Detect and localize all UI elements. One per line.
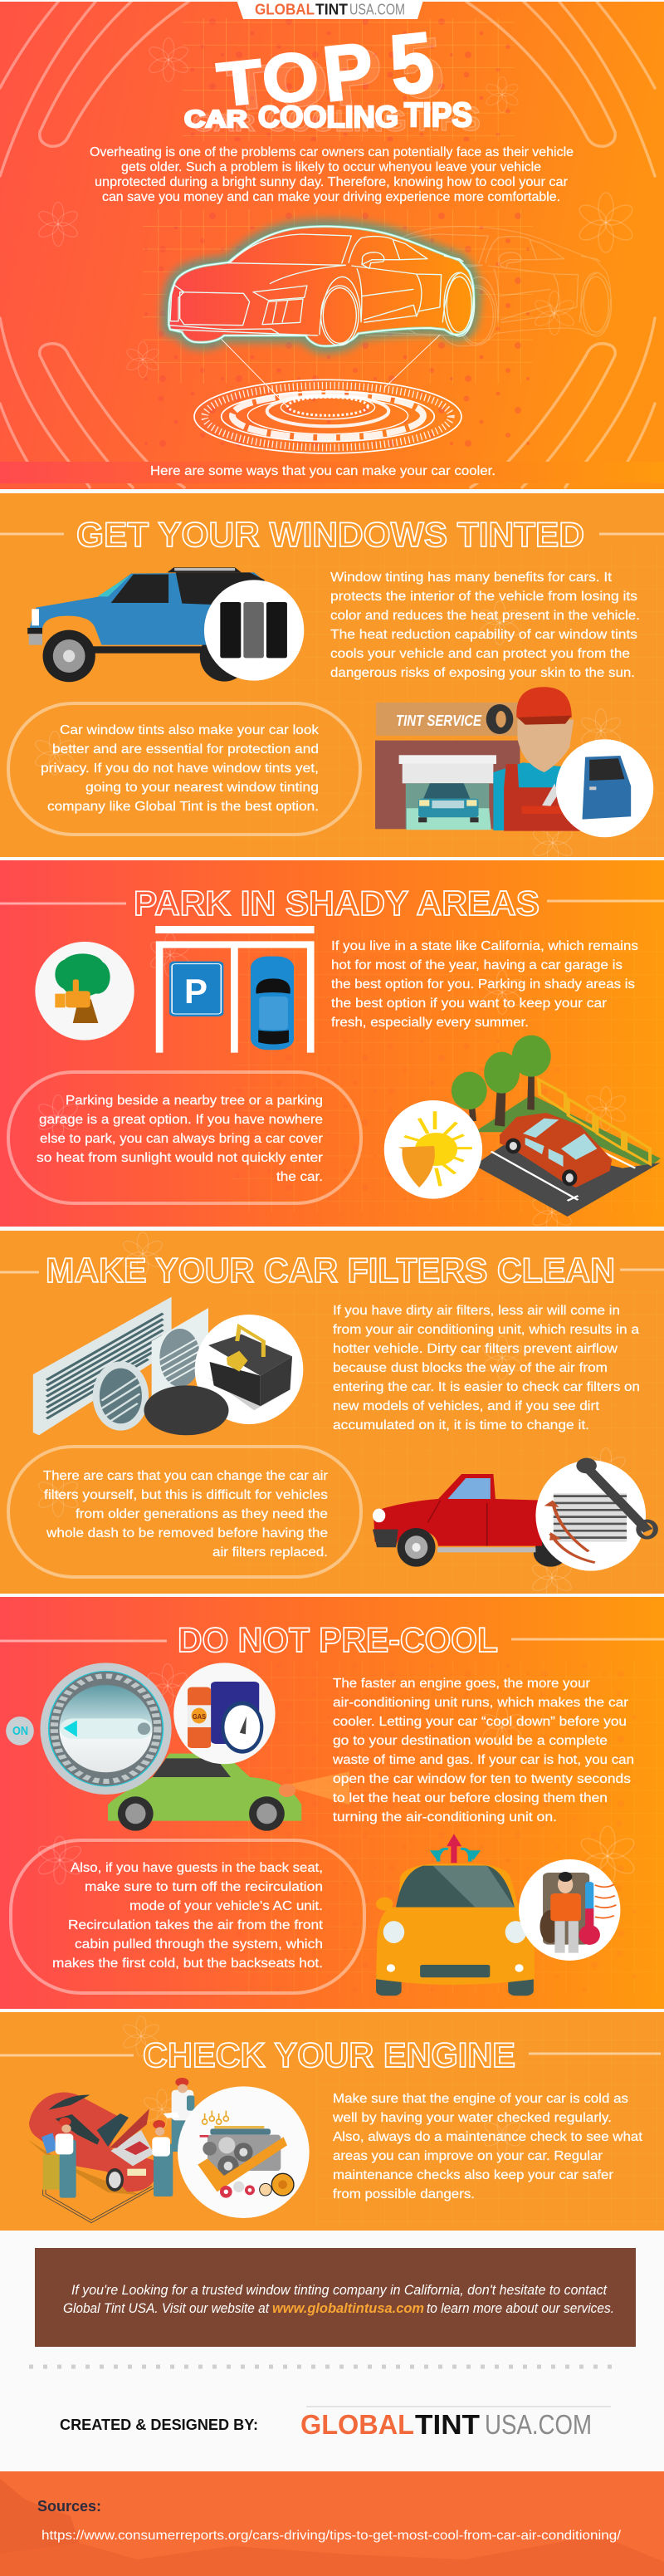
callout capsule: filters yourself, but this is difficult for vehicles: [44, 1488, 328, 1502]
callout capsule: Also, if you have guests in the back seat,: [71, 1861, 323, 1875]
title: T: [214, 47, 266, 120]
body text: hot for most of the year, having a car garage is: [331, 958, 622, 972]
logo tab: TINT: [315, 2, 348, 18]
callout capsule: so heat from sunlight would not quickly enter: [37, 1151, 323, 1165]
illustration: tint service garage and mechanic: [375, 687, 653, 837]
body text: fresh, especially every summer.: [331, 1016, 529, 1030]
intro text: unprotected during a bright sunny day. Therefore, knowing how to cool your car: [95, 175, 568, 189]
body text: If you live in a state like California, which remains: [331, 939, 638, 953]
heading: [0, 884, 664, 923]
body text: maintenance checks also keep your car safer: [333, 2168, 613, 2182]
body text: the best option for you. Parking in shady areas is: [331, 977, 635, 992]
callout capsule: the car.: [276, 1170, 323, 1184]
callout capsule: mode of your vehicle's AC unit.: [129, 1899, 323, 1913]
panel: check your engine: [0, 2012, 664, 2231]
icon: tree with thumbs up: [35, 942, 134, 1041]
callout capsule: [8, 1072, 361, 1203]
body text: new models of vehicles, and if you see dirt: [333, 1399, 600, 1413]
panel: call to action: If you're Looking for a trusted window tinting company in California, don't hesitate to contact: [71, 2282, 608, 2298]
body text: color and reduces the heat present in the vehicle.: [330, 609, 640, 623]
callout capsule: company like Global Tint is the best option.: [47, 800, 319, 814]
body text: go to your destination would be a complete: [333, 1734, 608, 1748]
title: COOLING: [266, 104, 407, 138]
callout capsule: from older generations as they need the: [76, 1507, 328, 1521]
callout capsule: [8, 1447, 361, 1577]
heading: MAKE YOUR CAR FILTERS CLEAN: [46, 1251, 615, 1290]
title: CAR: [184, 106, 247, 133]
title: COOLING: [258, 100, 398, 134]
panel: hero: [0, 0, 664, 489]
panel: park in shady areas: [0, 860, 664, 1234]
callout capsule: else to park, you can always bring a car cover: [40, 1132, 323, 1146]
callout capsule: garage is a great option. If you have nowhere: [39, 1113, 323, 1127]
credit: GLOBAL: [300, 2409, 414, 2440]
title: P: [319, 26, 378, 118]
divider dots: [29, 2365, 612, 2368]
heading: GET YOUR WINDOWS TINTED: [76, 515, 584, 554]
callout capsule: better and are essential for protection and: [52, 742, 319, 757]
body text: areas you can improve on your car. Regular: [333, 2149, 603, 2163]
title: 5: [395, 19, 448, 118]
callout capsule: [8, 703, 360, 835]
illustration: green car, AC knob, gas: [6, 1663, 349, 1831]
sign label: TINT SERVICE: [396, 713, 482, 729]
callout capsule: Parking beside a nearby tree or a parking: [66, 1094, 323, 1108]
credit: CREATED & DESIGNED BY:: [60, 2417, 258, 2433]
illustration: yellow car and hot passenger: [376, 1834, 620, 1996]
panel: call to action: Global Tint USA. Visit our website at: [63, 2300, 270, 2316]
illustration: hologram platform: [194, 335, 461, 453]
illustration: blue truck and tint rolls: [27, 567, 304, 682]
panel: do not pre-cool: [0, 1597, 664, 2009]
body text: If you have dirty air filters, less air will come in: [333, 1304, 620, 1318]
body text: accumulated on it, it is time to change it.: [333, 1418, 589, 1432]
title: TIPS: [404, 95, 472, 134]
title: 5: [385, 14, 438, 113]
illustration: isometric parking with trees: [384, 1036, 661, 1217]
heading: CHECK YOUR ENGINE: [143, 2035, 515, 2074]
panel: call to action: [35, 2248, 636, 2347]
illustration: parking bay: [155, 926, 315, 1053]
body text: Window tinting has many benefits for cars. It: [330, 571, 613, 585]
body text: The faster an engine goes, the more your: [333, 1677, 590, 1691]
callout capsule: going to your nearest window tinting: [85, 781, 319, 795]
body text: well by having your water checked regularly.: [332, 2111, 612, 2125]
body text: waste of time and gas. If your car is hot, you can: [332, 1753, 634, 1767]
heading: PARK IN SHADY AREAS: [134, 884, 540, 923]
credit: TINT: [415, 2409, 480, 2440]
callout capsule: cabin pulled through the system, which: [75, 1937, 323, 1952]
body text: from your air conditioning unit, which results in a: [333, 1323, 639, 1337]
body text: [330, 571, 640, 680]
credit: USA.COM: [485, 2409, 592, 2440]
heading: DO NOT PRE-COOL: [178, 1620, 498, 1659]
parking sign letter: P: [184, 972, 208, 1011]
panel: call to action: to learn more about our services.: [427, 2300, 614, 2316]
title: T: [224, 51, 276, 125]
title: P: [329, 31, 388, 123]
callout capsule: make sure to turn off the recirculation: [85, 1880, 323, 1894]
body text: the best option if you want to keep your car: [331, 997, 607, 1011]
body text: dangerous risks of exposing your skin to the sun.: [330, 666, 635, 680]
panel: sources: [0, 2471, 664, 2576]
illustration: mechanics repairing red car: [27, 2078, 194, 2223]
panel: call to action: www.globaltintusa.com: [272, 2300, 424, 2316]
illustration: vents, filter box: [33, 1297, 303, 1435]
body text: [331, 939, 638, 1030]
callout capsule: whole dash to be removed before having the: [46, 1526, 328, 1540]
illustration: glowing car: [168, 227, 612, 346]
GAS label: GAS: [193, 1713, 207, 1721]
source link: https://www.consumerreports.org/cars-driving/tips-to-get-most-cool-from-car-air-conditioning/: [42, 2529, 622, 2543]
icon: engine with check mark: [178, 2086, 310, 2218]
intro text: [90, 145, 574, 204]
body text: air-conditioning unit runs, which makes the car: [333, 1696, 628, 1710]
sources heading: Sources:: [37, 2498, 101, 2515]
title: [184, 14, 481, 138]
body text: to let the heat our before closing them then: [333, 1791, 608, 1805]
body text: entering the car. It is easier to check car filters on: [333, 1380, 640, 1394]
callout capsule: Car window tints also make your car look: [60, 723, 319, 737]
callout capsule: privacy. If you do not have window tints yet,: [41, 762, 319, 776]
body text: Make sure that the engine of your car is cold as: [333, 2092, 628, 2106]
callout capsule: Recirculation takes the air from the front: [68, 1918, 324, 1932]
body text: cools your vehicle and can protect you from the: [330, 647, 630, 661]
callout capsule: makes the first cold, but the backseats hot.: [52, 1956, 323, 1971]
logo tab: [237, 0, 423, 19]
body text: from possible dangers.: [333, 2187, 475, 2201]
credit: [60, 2407, 611, 2440]
body text: [332, 1677, 634, 1824]
title: CAR: [193, 110, 256, 137]
body text: [332, 2092, 643, 2201]
panel: make your car filters clean: [0, 1231, 664, 1599]
ON label: ON: [12, 1724, 28, 1738]
body text: cooler. Letting your car “cool down” before you: [333, 1715, 627, 1729]
body text: [333, 1304, 640, 1432]
logo tab: GLOBAL: [255, 2, 315, 18]
body text: hotter vehicle. Dirty car filters prevent airflow: [333, 1342, 618, 1356]
body text: The heat reduction capability of car window tints: [330, 628, 637, 642]
callout capsule: There are cars that you can change the car air: [43, 1469, 328, 1483]
body text: open the car window for ten to twenty seconds: [333, 1772, 631, 1786]
body text: turning the air-conditioning unit on.: [333, 1810, 557, 1824]
body text: because dust blocks the way of the air from: [333, 1361, 608, 1375]
title: O: [258, 37, 323, 119]
logo tab: USA.COM: [349, 2, 405, 18]
callout capsule: [11, 1840, 364, 1993]
panel: get your windows tinted: [0, 493, 664, 864]
title: TIPS: [413, 100, 481, 138]
closing line band: Here are some ways that you can make your car cooler.: [150, 464, 496, 478]
intro text: Overheating is one of the problems car owners can potentially face as their vehicle: [90, 145, 574, 159]
body text: protects the interior of the vehicle from losing its: [330, 590, 637, 604]
title: O: [268, 42, 333, 124]
callout capsule: air filters replaced.: [212, 1545, 328, 1560]
illustration: red pickup and filter: [373, 1458, 656, 1571]
intro text: gets older. Such a problem is likely to occur whenyou leave your vehicle: [121, 160, 541, 174]
intro text: can save you money and can make your driving experience more comfortable.: [102, 190, 560, 204]
body text: Also, always do a maintenance check to see what: [333, 2130, 643, 2144]
closing line band: [0, 462, 664, 483]
